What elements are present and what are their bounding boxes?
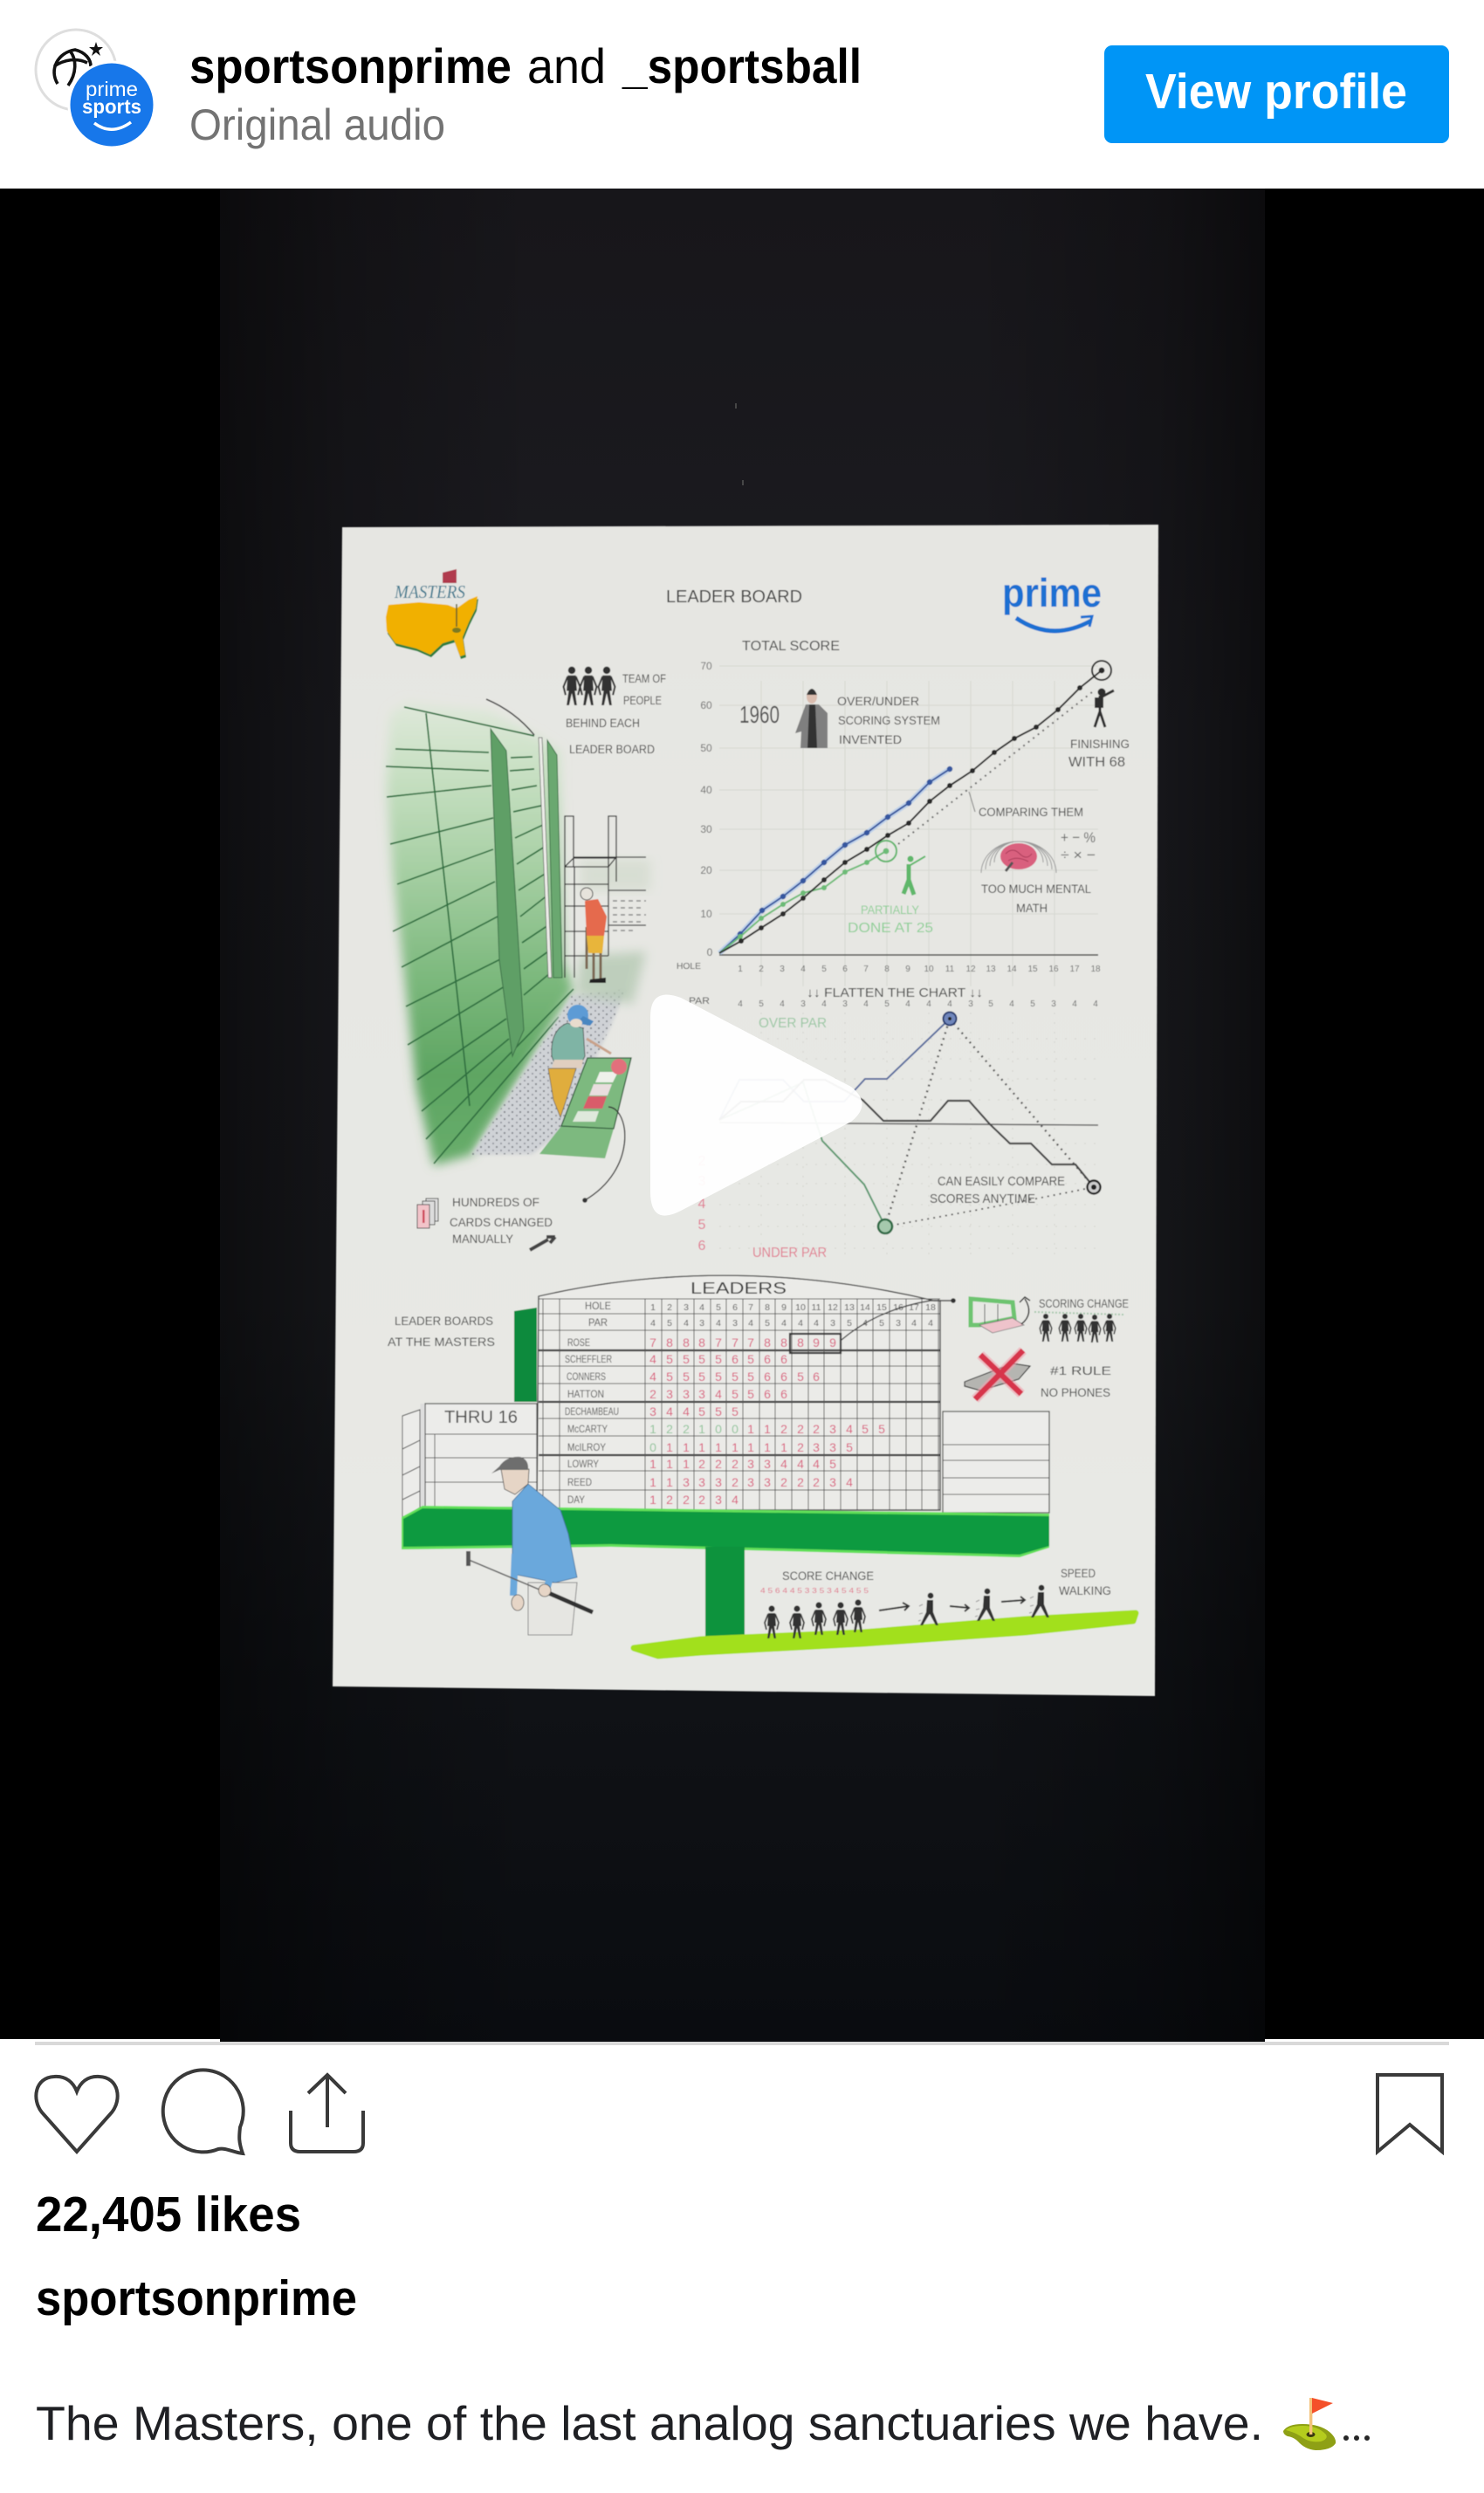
wall slats: [386, 707, 574, 1164]
player names: DAY: [567, 1495, 585, 1506]
thru 16 board: THRU 16: [444, 1408, 518, 1427]
score rows: 1133323322234: [649, 1475, 853, 1489]
walking caption: SPEED: [1061, 1567, 1096, 1580]
team caption: TEAM OF: [622, 672, 666, 685]
action icons: [36, 2070, 1442, 2153]
hole numbers: 12: [965, 965, 976, 974]
icon: profile avatars: [36, 30, 155, 148]
annotation: finishing with 68: FINISHING: [1070, 738, 1130, 751]
cap: [491, 1457, 528, 1473]
chart: flattened over under par: [698, 1013, 1100, 1260]
right hand: [539, 1584, 551, 1597]
end marker: black: [1088, 1180, 1100, 1194]
arms: [513, 1545, 559, 1596]
video frame background: [0, 189, 1484, 2042]
y axis labels: 20: [700, 864, 712, 876]
icon: Masters logo: MASTERS: [394, 581, 465, 602]
annotation: over under scoring: OVER/UNDER: [837, 695, 919, 708]
y axis labels: 10: [700, 908, 712, 920]
right side board: [943, 1411, 1049, 1513]
annotation: too much mental math: TOO MUCH MENTAL: [981, 883, 1091, 896]
header labels: PAR: [588, 1316, 608, 1329]
walking arrows: [950, 1597, 1025, 1611]
annotation: can easily compare: CAN EASILY COMPARE: [938, 1174, 1065, 1189]
hole numbers: 15: [1027, 965, 1038, 974]
score rows: 344555: [649, 1404, 739, 1418]
hole numbers: 16: [1048, 965, 1059, 974]
score rows: 0: [649, 1440, 656, 1454]
likes count: 22,405 likes: [36, 2187, 301, 2242]
over par label: OVER PAR: [759, 1016, 827, 1031]
hole numbers: 14: [1007, 965, 1017, 974]
score rows: 122234: [649, 1493, 739, 1507]
worker on ladder: [581, 888, 607, 983]
under par numbers: [698, 1154, 706, 1253]
annotation: leader boards at the masters: LEADER BOARDS: [395, 1315, 493, 1328]
tray of score cards: [539, 1058, 631, 1158]
icon: wrench: [530, 1237, 555, 1250]
hole label: HOLE: [677, 962, 701, 972]
annotation: partially done at 25: [848, 903, 933, 936]
team caption: BEHIND EACH: [566, 717, 640, 730]
card operator: [548, 1005, 611, 1117]
annotation: 1960: 1960: [739, 701, 780, 728]
cards caption: MANUALLY: [452, 1233, 513, 1246]
thru 16 board: [402, 1404, 537, 1545]
icon: speed walkers: [918, 1585, 1049, 1625]
annotation: no phones: [965, 1350, 1111, 1399]
player names: [565, 1338, 619, 1506]
math symbols: [1061, 829, 1096, 863]
black line: [719, 1080, 1094, 1187]
annotation: over under scoring: [837, 695, 940, 746]
horizontal rows: [539, 1299, 940, 1490]
y axis labels: 50: [700, 742, 712, 754]
y axis labels: 40: [700, 784, 712, 796]
annotation: over under scoring: INVENTED: [839, 733, 902, 746]
icon: profile avatars: sports: [82, 95, 141, 118]
callout line: [842, 1298, 956, 1340]
math symbols: ÷ × −: [1061, 847, 1096, 863]
icon: video play button: [650, 994, 862, 1216]
under par label: UNDER PAR: [752, 1246, 827, 1260]
header labels: HOLE: [585, 1300, 611, 1312]
annotation: can easily compare: [930, 1174, 1065, 1206]
green line: [719, 1082, 885, 1226]
score rows: [649, 1336, 885, 1507]
view profile button: [1104, 45, 1449, 143]
player names: McILROY: [567, 1443, 606, 1453]
faint grid: [719, 1013, 1098, 1257]
rule caption: #1 RULE: [1050, 1364, 1111, 1377]
leaders title: LEADERS: [690, 1280, 787, 1297]
icon: share: [291, 2075, 363, 2152]
heading: total score: TOTAL SCORE: [742, 639, 840, 654]
annotation: too much mental math: MATH: [1016, 902, 1048, 915]
icon: profile avatars: prime: [86, 78, 138, 100]
title: leader board: LEADER BOARD: [666, 587, 802, 607]
highlight box: [790, 1334, 841, 1353]
annotation: over under scoring: SCORING SYSTEM: [838, 714, 940, 727]
gravel path: [471, 989, 626, 1155]
ground stripe: [634, 1613, 1136, 1656]
green beam: [402, 1506, 1049, 1557]
annotation: finishing with 68: [1068, 738, 1130, 770]
hole numbers: 13: [986, 965, 996, 974]
walking caption: WALKING: [1059, 1584, 1111, 1597]
team caption: LEADER BOARD: [569, 743, 655, 756]
annotation: can easily compare: SCORES ANYTIME: [930, 1192, 1035, 1206]
header labels: [585, 1300, 611, 1329]
heading: flatten the chart: ↓↓ FLATTEN THE CHART ↓↓: [807, 986, 983, 1000]
hole numbers row: 12: [828, 1302, 838, 1313]
icon: man in suit: [795, 689, 828, 748]
divider: [35, 2042, 1449, 2045]
y axis labels: 70: [700, 660, 712, 672]
hole numbers: 9: [905, 965, 910, 974]
blue player line: [719, 766, 952, 953]
caption ellipsis: [1343, 2435, 1370, 2441]
hole numbers row: 14: [860, 1302, 870, 1313]
icon: golf flag emoji: [1283, 2398, 1336, 2450]
illustration: back of manual leader board: [386, 699, 650, 1203]
dotted comparison triangle: [885, 1019, 1094, 1226]
cards caption: HUNDREDS OF: [452, 1196, 539, 1209]
panel: hand-drawn leader board paper: [333, 525, 1158, 1696]
hole numbers row: 10: [795, 1302, 806, 1313]
hole numbers: 4: [800, 965, 806, 974]
paper sheet: [333, 525, 1158, 1696]
hole numbers row: 17: [909, 1302, 919, 1313]
view profile button: View profile: [1145, 64, 1407, 120]
left hand: [512, 1595, 524, 1610]
golf club: [466, 1551, 593, 1612]
icon: crossed out phone: [965, 1350, 1030, 1399]
team caption: [566, 672, 666, 756]
par row: PAR: [689, 996, 710, 1006]
icon: green golfer: [903, 855, 925, 895]
hole numbers row: 8: [765, 1302, 770, 1313]
y axis labels: [700, 660, 713, 958]
icon: Masters logo: [386, 569, 478, 659]
hole numbers row: 5: [716, 1302, 721, 1313]
rule caption: NO PHONES: [1041, 1386, 1110, 1399]
y axis labels: 0: [707, 946, 713, 958]
icon: bookmark: [1378, 2075, 1442, 2152]
green pillar one: [491, 729, 524, 1056]
hole numbers: 6: [842, 965, 848, 974]
dotted projection: [898, 692, 1092, 844]
hole numbers: 18: [1090, 965, 1101, 974]
green wall shading: [387, 703, 574, 1165]
par row: 454343454443545344: [738, 999, 1098, 1009]
player names: LOWRY: [567, 1459, 599, 1470]
green post: [705, 1547, 745, 1639]
scaffold ladder: [565, 816, 646, 978]
blue line: [719, 1019, 950, 1120]
player names: HATTON: [567, 1390, 604, 1400]
white gap column: [539, 738, 552, 978]
hole numbers: 8: [884, 965, 890, 974]
caption author: sportsonprime: [36, 2270, 357, 2326]
score rows: 112223455: [747, 1422, 885, 1436]
x axis: [719, 954, 1098, 956]
score rows: 111222334445: [649, 1457, 836, 1471]
y axis labels: 60: [700, 699, 712, 711]
roof curve: [486, 699, 534, 735]
annotation: leader boards at the masters: AT THE MASTERS: [388, 1336, 495, 1349]
hole numbers row: 9: [781, 1302, 787, 1313]
scribbled note: [613, 901, 646, 931]
arrow to caption: [1020, 1297, 1030, 1324]
audio label: Original audio: [189, 100, 445, 149]
hole numbers row: 11: [812, 1302, 821, 1313]
hole numbers row: 2: [667, 1302, 672, 1313]
hole numbers: 5: [821, 965, 827, 974]
icon: cards: [417, 1198, 438, 1228]
player names: CONNERS: [567, 1372, 606, 1383]
annotation: score change: [760, 1569, 909, 1638]
zero line: [719, 1123, 1098, 1125]
hole numbers row: 15: [876, 1302, 887, 1313]
score rows: 45555556656: [649, 1370, 820, 1384]
icon: finishing golfer: [1095, 690, 1114, 727]
hole numbers row: 1: [650, 1302, 656, 1313]
account names: and: [527, 38, 606, 93]
green pillar two: [547, 740, 562, 978]
end marker: blue: [943, 1013, 957, 1025]
hole numbers row: 4: [699, 1302, 704, 1313]
score rows: 111111112335: [666, 1440, 853, 1454]
icon: prime logo: [1002, 570, 1102, 631]
cards caption: [450, 1196, 553, 1246]
annotation: finishing with 68: WITH 68: [1068, 755, 1125, 770]
team caption: PEOPLE: [623, 694, 662, 707]
cards caption: CARDS CHANGED: [450, 1216, 553, 1229]
annotation: scoring change: [971, 1297, 1129, 1343]
hole numbers row: 13: [844, 1302, 855, 1313]
score rows: 455556566: [649, 1352, 787, 1366]
account names: _sportsball: [622, 38, 862, 93]
under par numbers: 2: [698, 1154, 706, 1169]
chart grid: [719, 666, 1098, 986]
annotation: partially done at 25: PARTIALLY: [861, 903, 920, 917]
account names: sportsonprime: [189, 38, 512, 93]
pointer curve: [582, 1107, 625, 1203]
score rows: 233345566: [649, 1387, 787, 1401]
hole numbers row: 16: [893, 1302, 903, 1313]
annotation: comparing them: COMPARING THEM: [979, 806, 1083, 819]
annotation: speed walking: [918, 1567, 1111, 1625]
annotation: hundreds of cards: [417, 1196, 555, 1250]
hole numbers: 11: [945, 965, 955, 974]
face: [501, 1469, 529, 1494]
player names: McCARTY: [567, 1425, 608, 1435]
annotation: too much mental math: [981, 883, 1091, 915]
header bar: [36, 30, 1449, 149]
vertical columns: [543, 1299, 938, 1510]
under par numbers: 4: [698, 1197, 706, 1212]
annotation: team of people: [564, 667, 666, 756]
hole numbers: 2: [759, 965, 764, 974]
grey green smudge: [576, 951, 646, 1004]
rule caption: [1041, 1364, 1111, 1399]
left green side panel: [514, 1308, 537, 1402]
score change caption: SCORE CHANGE: [782, 1569, 874, 1583]
caption text: The Masters, one of the last analog sanctuaries we have.: [36, 2397, 1263, 2450]
annotation: partially done at 25: DONE AT 25: [848, 921, 933, 936]
end marker: green: [878, 1219, 892, 1233]
hole numbers: 7: [863, 965, 869, 974]
par row: [689, 996, 1098, 1009]
player names: SCHEFFLER: [565, 1355, 612, 1365]
smudge behind scaffold: [581, 860, 650, 890]
math symbols: + − %: [1061, 829, 1096, 846]
shirt: [512, 1484, 577, 1583]
under par numbers: 6: [698, 1239, 706, 1253]
scoring caption: [1034, 1297, 1129, 1315]
y axis labels: 30: [700, 823, 712, 835]
player names: ROSE: [567, 1338, 590, 1349]
illustration: golfer in blue: [466, 1457, 593, 1635]
icon: scoring team: [1040, 1314, 1116, 1343]
hole numbers: 3: [780, 965, 785, 974]
hole numbers: 10: [924, 965, 934, 974]
par numbers row: 454343454443545344: [650, 1318, 933, 1329]
icon: changing team: [765, 1599, 865, 1638]
black player line: [719, 661, 1111, 953]
chart: total score: [677, 639, 1130, 986]
under par numbers: 5: [698, 1218, 706, 1233]
hole numbers row: 18: [925, 1302, 936, 1313]
icon: comment: [163, 2070, 244, 2153]
tiny red scores: 4 5 6 4 4 5 3 3 5 3 4 5 4 5 5: [760, 1587, 869, 1595]
player names: REED: [567, 1478, 592, 1488]
scoring caption: SCORING CHANGE: [1039, 1297, 1129, 1310]
icon: brain: [981, 841, 1056, 873]
hole numbers: 1: [738, 965, 743, 974]
annotation: leader boards at the masters: [388, 1315, 495, 1349]
board top arc: [537, 1275, 940, 1510]
walking caption: [1059, 1567, 1111, 1597]
under par numbers: 3: [698, 1174, 706, 1189]
arrow: [879, 1603, 909, 1610]
hole numbers row: 7: [748, 1302, 753, 1313]
score rows: 122100: [649, 1422, 739, 1436]
score rows: 788877788899: [649, 1336, 836, 1350]
icon: prime logo: prime: [1002, 570, 1102, 615]
hole numbers row: 6: [732, 1302, 738, 1313]
player names: DECHAMBEAU: [565, 1407, 619, 1418]
hole numbers: 17: [1069, 965, 1080, 974]
icon: heart: [36, 2077, 118, 2152]
icon: mini board: [971, 1299, 1024, 1333]
icon: team silhouettes: [564, 667, 615, 705]
trousers: [528, 1583, 577, 1635]
hole numbers row: 3: [684, 1302, 689, 1313]
main leaders board: [537, 1275, 956, 1510]
illustration: masters leader board structure: [402, 1275, 1049, 1639]
green player line: [719, 841, 897, 953]
